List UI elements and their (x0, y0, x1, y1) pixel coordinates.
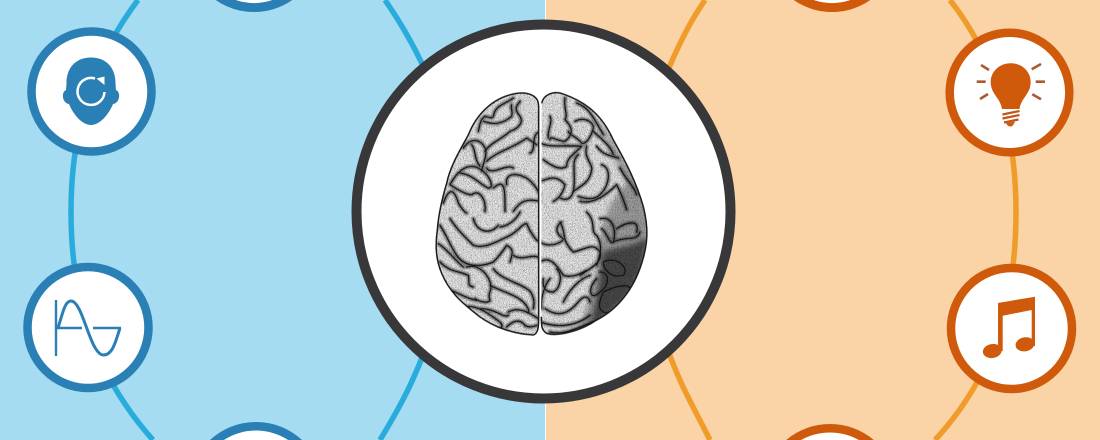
panel: right orange background (546, 0, 1100, 440)
left oval connector line (71, 0, 425, 440)
illustration: brain (433, 90, 650, 338)
node: blue head with refresh icon (32, 32, 152, 152)
icon: music note (982, 297, 1036, 360)
node: blue sine wave icon (28, 267, 148, 388)
node: orange bottom (cropped) (786, 424, 874, 440)
node: blue top (cropped) (216, 0, 292, 12)
node: blue bottom (cropped) (210, 422, 302, 440)
central circle (356, 24, 730, 398)
icon: light bulb (991, 63, 1031, 109)
icon: refresh arrow (78, 76, 104, 105)
panel: left blue background (0, 0, 545, 440)
icon: head (63, 58, 119, 125)
right oval connector line (668, 0, 1016, 440)
brain hemispheres with engraved folds (433, 90, 650, 338)
icon: sine wave (56, 300, 121, 356)
node: orange top (cropped) (794, 0, 870, 12)
brain outline and central fissure (436, 93, 647, 335)
node: orange light bulb icon (950, 33, 1069, 152)
node: orange music note icon (951, 268, 1072, 389)
icon: bulb base and rays (977, 64, 1045, 127)
